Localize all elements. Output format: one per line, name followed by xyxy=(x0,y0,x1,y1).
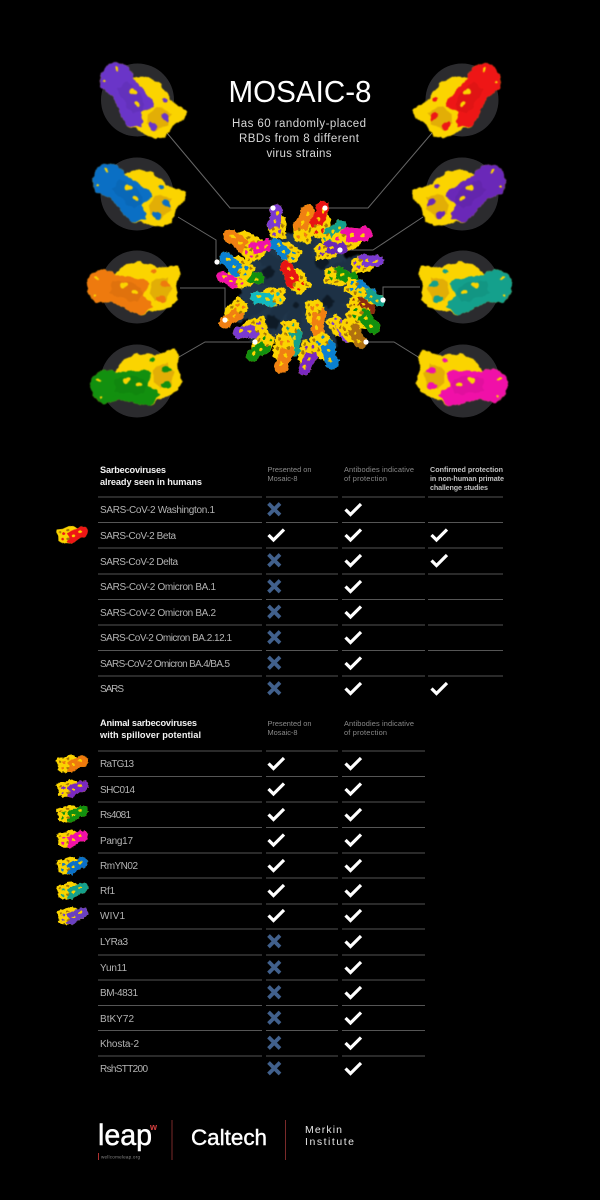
row: LYRa3: LYRa3 xyxy=(100,937,128,948)
row: SARS-CoV-2 Beta: SARS-CoV-2 Beta xyxy=(100,531,176,542)
subtitle: RBDs from 8 different xyxy=(239,133,360,145)
row: SARS-CoV-2 Beta xyxy=(98,522,503,542)
row: Pang17 xyxy=(98,828,425,847)
row: SARS-CoV-2 Washington.1 xyxy=(98,497,503,516)
row: BtKY72: BtKY72 xyxy=(100,1014,134,1025)
row: SARS: SARS xyxy=(100,684,124,695)
row: Yun11: Yun11 xyxy=(100,963,127,974)
subtitle: virus strains xyxy=(266,148,332,160)
row: SARS-CoV-2 Omicron BA.2.12.1: SARS-CoV-2 Omicron BA.2.12.1 xyxy=(100,633,232,644)
row: BM-4831 xyxy=(98,980,425,999)
table heading: Sarbecoviruses xyxy=(100,465,166,475)
row: SARS-CoV-2 Omicron BA.4/BA.5: SARS-CoV-2 Omicron BA.4/BA.5 xyxy=(100,659,230,670)
subtitle: Has 60 randomly-placed xyxy=(232,118,366,130)
row: Yun11 xyxy=(98,955,425,974)
column heading: presented: Presented on xyxy=(268,465,312,474)
row: RmYN02 xyxy=(98,853,425,872)
row: RshSTT200 xyxy=(98,1056,425,1075)
logo: Merkin Institute: Institute xyxy=(305,1136,354,1148)
row: Khosta-2: Khosta-2 xyxy=(100,1039,139,1050)
column heading: confirmed protection: Confirmed protection xyxy=(430,465,503,474)
column heading: confirmed protection: challenge studies xyxy=(430,483,488,492)
row: BM-4831: BM-4831 xyxy=(100,988,138,999)
row: WIV1: WIV1 xyxy=(100,911,125,922)
column heading: antibodies: Antibodies indicative xyxy=(344,719,414,728)
spike callout: violet, right xyxy=(412,155,513,234)
row: Rs4081 xyxy=(98,802,425,821)
spike callout: teal, right xyxy=(421,250,511,324)
table: sarbecoviruses seen in humans xyxy=(98,465,504,695)
row: SARS-CoV-2 Omicron BA.4/BA.5 xyxy=(98,650,503,670)
row: SARS-CoV-2 Omicron BA.1: SARS-CoV-2 Omicron BA.1 xyxy=(100,582,216,593)
row: Rf1 xyxy=(98,878,425,897)
row: SARS-CoV-2 Omicron BA.2: SARS-CoV-2 Omicron BA.2 xyxy=(100,608,216,619)
logo: leap: leap xyxy=(98,1119,152,1152)
marker dots xyxy=(214,205,386,345)
virus core xyxy=(238,232,360,348)
logo: leap: wellcomeleap.org xyxy=(101,1154,140,1160)
leader lines xyxy=(167,133,432,361)
title: MOSAIC-8 xyxy=(228,75,372,109)
row: SARS-CoV-2 Washington.1: SARS-CoV-2 Washington.1 xyxy=(100,505,215,516)
column heading: antibodies: of protection xyxy=(344,728,387,737)
row: WIV1 xyxy=(98,904,425,922)
row: SARS-CoV-2 Omicron BA.2.12.1 xyxy=(98,625,503,644)
column heading: antibodies: Antibodies indicative xyxy=(344,465,414,474)
row: Rs4081: Rs4081 xyxy=(100,810,131,821)
row: Pang17: Pang17 xyxy=(100,836,133,847)
row: SHC014: SHC014 xyxy=(100,785,135,796)
logo: leap: w xyxy=(149,1122,158,1132)
row: SARS-CoV-2 Delta: SARS-CoV-2 Delta xyxy=(100,557,178,568)
spike callout: blue, left xyxy=(84,154,186,235)
divider xyxy=(172,1120,173,1160)
icon: beta strain thumbnail xyxy=(56,524,89,545)
spike callout: green, bottom left xyxy=(87,344,186,418)
icon: strain thumbnails xyxy=(56,753,89,926)
column heading: presented: Mosaic-8 xyxy=(268,474,298,483)
row: SARS-CoV-2 Delta xyxy=(98,548,503,568)
row: LYRa3 xyxy=(98,929,425,948)
RBD cluster xyxy=(215,201,387,377)
subtitle xyxy=(232,118,366,160)
table heading: Animal sarbecoviruses xyxy=(100,718,197,728)
column heading: confirmed protection: in non-human primate xyxy=(430,474,504,483)
spike callout: magenta, bottom right xyxy=(413,344,511,418)
row: SHC014 xyxy=(98,776,425,796)
column heading: presented: Presented on xyxy=(268,719,312,728)
row: BtKY72 xyxy=(98,1006,425,1025)
row: RmYN02: RmYN02 xyxy=(100,861,138,872)
row: SARS-CoV-2 Omicron BA.1 xyxy=(98,574,503,593)
logo: Caltech: Caltech xyxy=(191,1125,267,1150)
column heading: antibodies: of protection xyxy=(344,474,387,483)
spike callout: purple, top left xyxy=(88,52,188,148)
table heading: already seen in humans xyxy=(100,477,202,487)
virus particle xyxy=(215,201,387,377)
row: RaTG13: RaTG13 xyxy=(100,759,134,770)
table: animal sarbecoviruses xyxy=(98,718,425,1075)
divider xyxy=(285,1120,286,1160)
column heading: presented: Mosaic-8 xyxy=(268,728,298,737)
logo: Merkin Institute: Merkin xyxy=(305,1124,342,1136)
row: RshSTT200: RshSTT200 xyxy=(100,1064,148,1075)
table heading: with spillover potential xyxy=(99,730,201,740)
row: Rf1: Rf1 xyxy=(100,886,115,897)
spike callout: orange, left xyxy=(88,250,178,324)
spike callout: red, top right xyxy=(411,53,512,147)
row: SARS-CoV-2 Omicron BA.2 xyxy=(98,600,503,619)
row: Khosta-2 xyxy=(98,1030,425,1050)
row: RaTG13 xyxy=(98,751,425,770)
row: SARS xyxy=(98,676,503,695)
